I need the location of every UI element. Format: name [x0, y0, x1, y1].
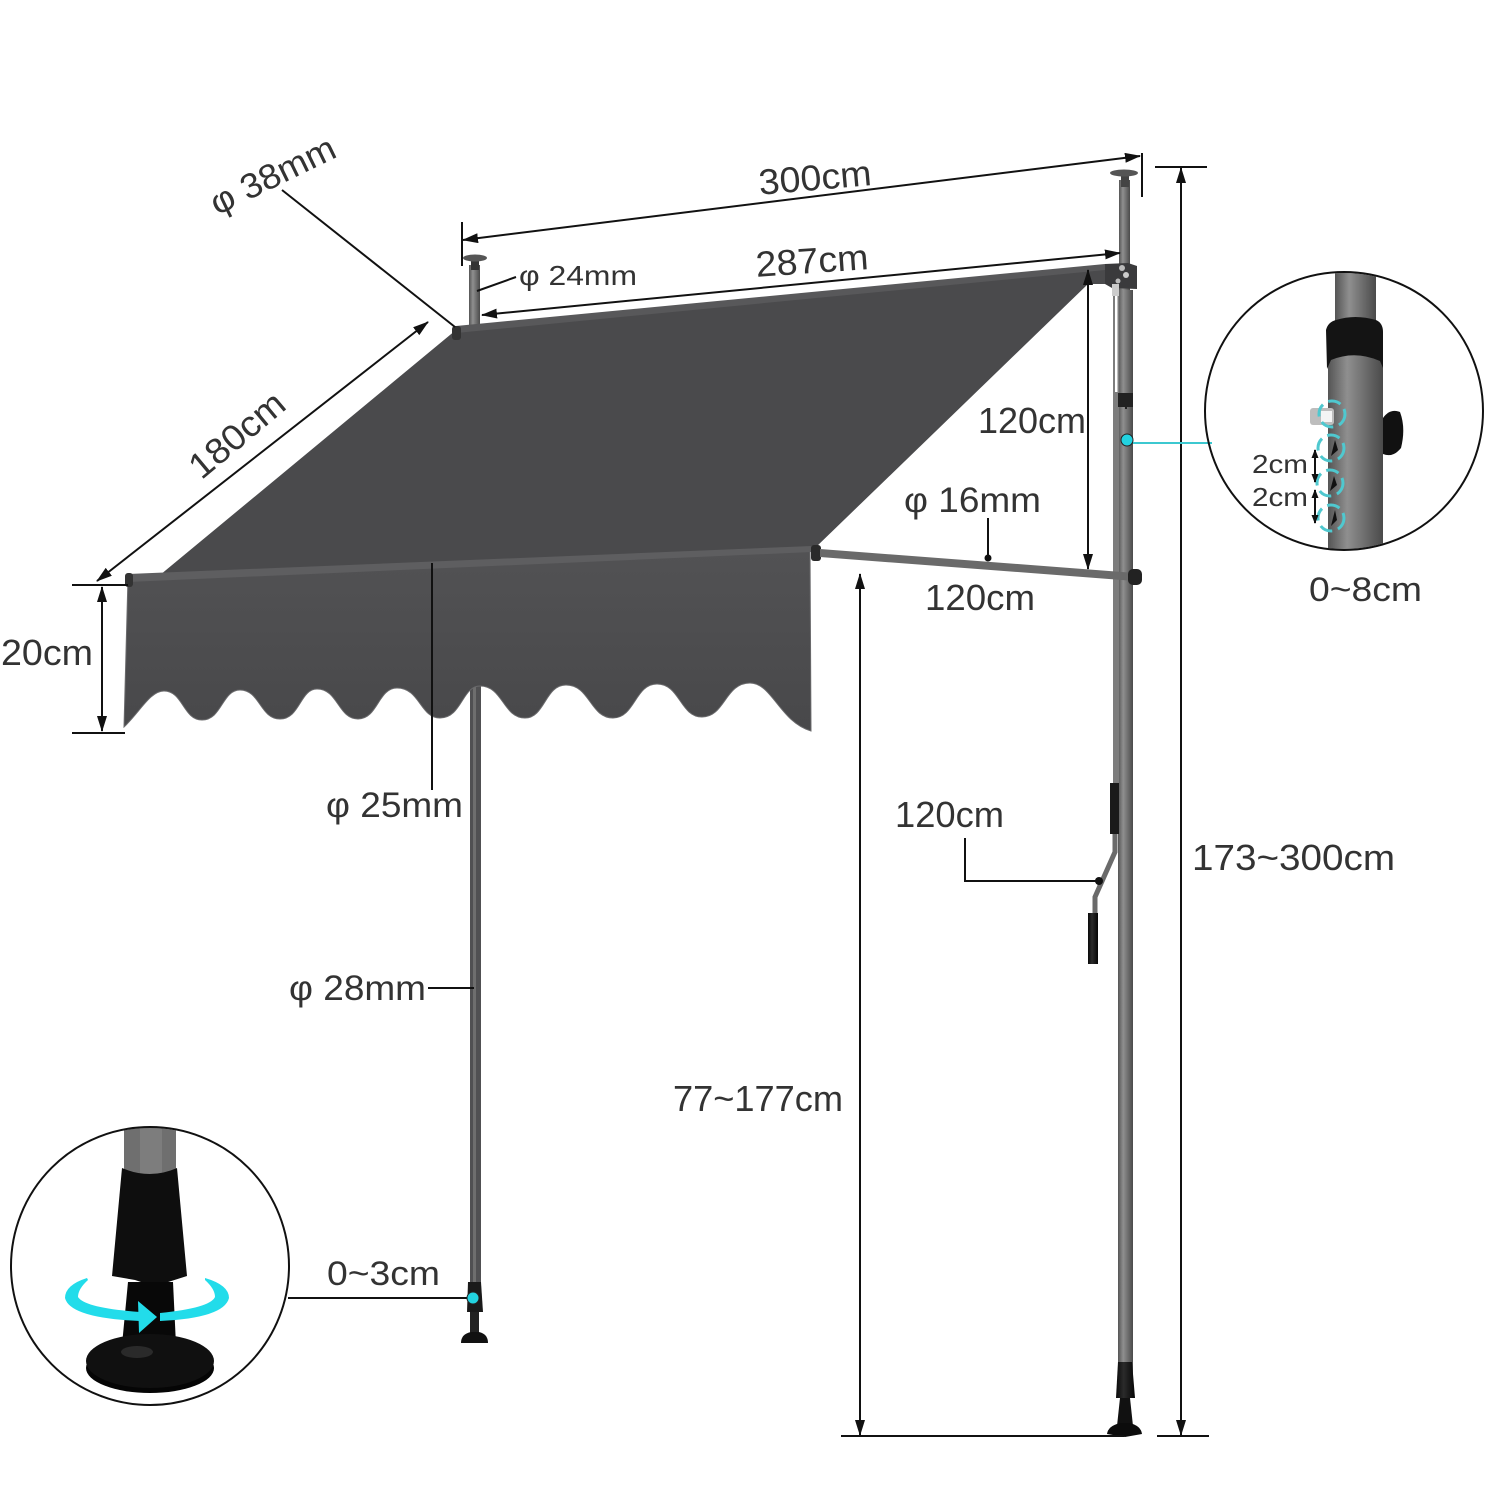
dimension: 180cm: 180cm: [180, 383, 293, 487]
inset: adjustable pole detail: 2cm: [1252, 482, 1308, 512]
left front pole: [461, 686, 488, 1343]
valance with scalloped edge: [124, 548, 811, 731]
label: phi 38mm: φ 38mm: [204, 128, 342, 223]
dimension: 300cm: [462, 152, 1142, 266]
dimension: 287cm: 287cm: [754, 236, 870, 285]
dimension: 180cm: [97, 322, 428, 581]
left rear short pole: [463, 254, 487, 327]
label: 120cm crank: 120cm: [895, 794, 1004, 835]
front bar end caps: [125, 545, 821, 587]
label: phi 24mm: [477, 260, 637, 291]
dimension: 120cm arm drop: 120cm: [978, 400, 1086, 441]
label: phi 25mm: φ 25mm: [326, 786, 463, 825]
label: 120cm crank: [895, 794, 1103, 885]
rear roller end cap: [452, 326, 461, 340]
dimension: 20cm: 20cm: [1, 632, 93, 673]
callout: pole height marker: [1121, 434, 1212, 446]
label: phi 24mm: φ 24mm: [519, 260, 637, 291]
sloped canopy fabric: [160, 266, 1105, 575]
label: phi 28mm: φ 28mm: [289, 969, 426, 1008]
label: 0~8cm: 0~8cm: [1309, 571, 1422, 609]
bracket at top of right pole: [1105, 263, 1137, 296]
inset: adjustable pole detail: 2cm: [1252, 449, 1308, 479]
callout: foot height marker: 0~3cm: [327, 1255, 440, 1293]
front bar: [128, 546, 812, 582]
dimension: 77~177cm: 77~177cm: [673, 1078, 843, 1119]
label: phi 16mm: φ 16mm: [904, 481, 1041, 520]
callout: foot height marker: [288, 1255, 479, 1304]
label: phi 16mm: [904, 481, 1041, 562]
right pole foot: [1107, 1362, 1142, 1437]
crank handle: [1088, 783, 1119, 964]
dimension: 287cm: [482, 236, 1120, 315]
folding arm: [820, 549, 1142, 585]
label: phi 38mm: [204, 128, 455, 327]
dimension: 300cm: 300cm: [757, 152, 873, 203]
rear roller: [456, 264, 1105, 333]
dimension: 173~300cm: 173~300cm: [1192, 837, 1395, 878]
inset: rotating foot detail: [11, 1120, 289, 1405]
label: 120cm arm length: 120cm: [925, 577, 1035, 618]
inset: adjustable pole detail: [1205, 270, 1483, 555]
right tall pole: [1110, 170, 1138, 1395]
